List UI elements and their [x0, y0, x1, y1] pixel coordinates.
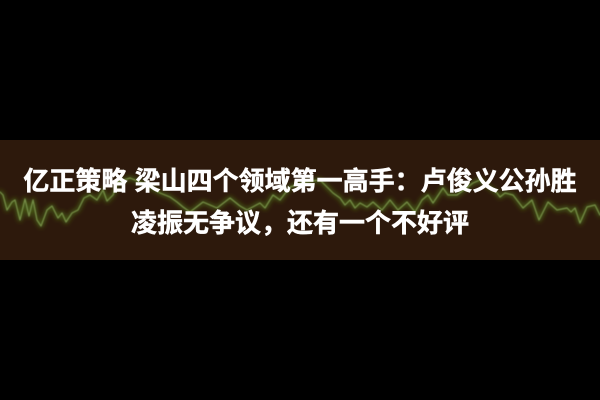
title: 亿正策略 梁山四个领域第一高手：卢俊义公孙胜	[23, 166, 577, 196]
panel: dark brown band	[0, 140, 600, 260]
title: 凌振无争议，还有一个不好评	[131, 208, 469, 238]
title	[23, 166, 577, 238]
